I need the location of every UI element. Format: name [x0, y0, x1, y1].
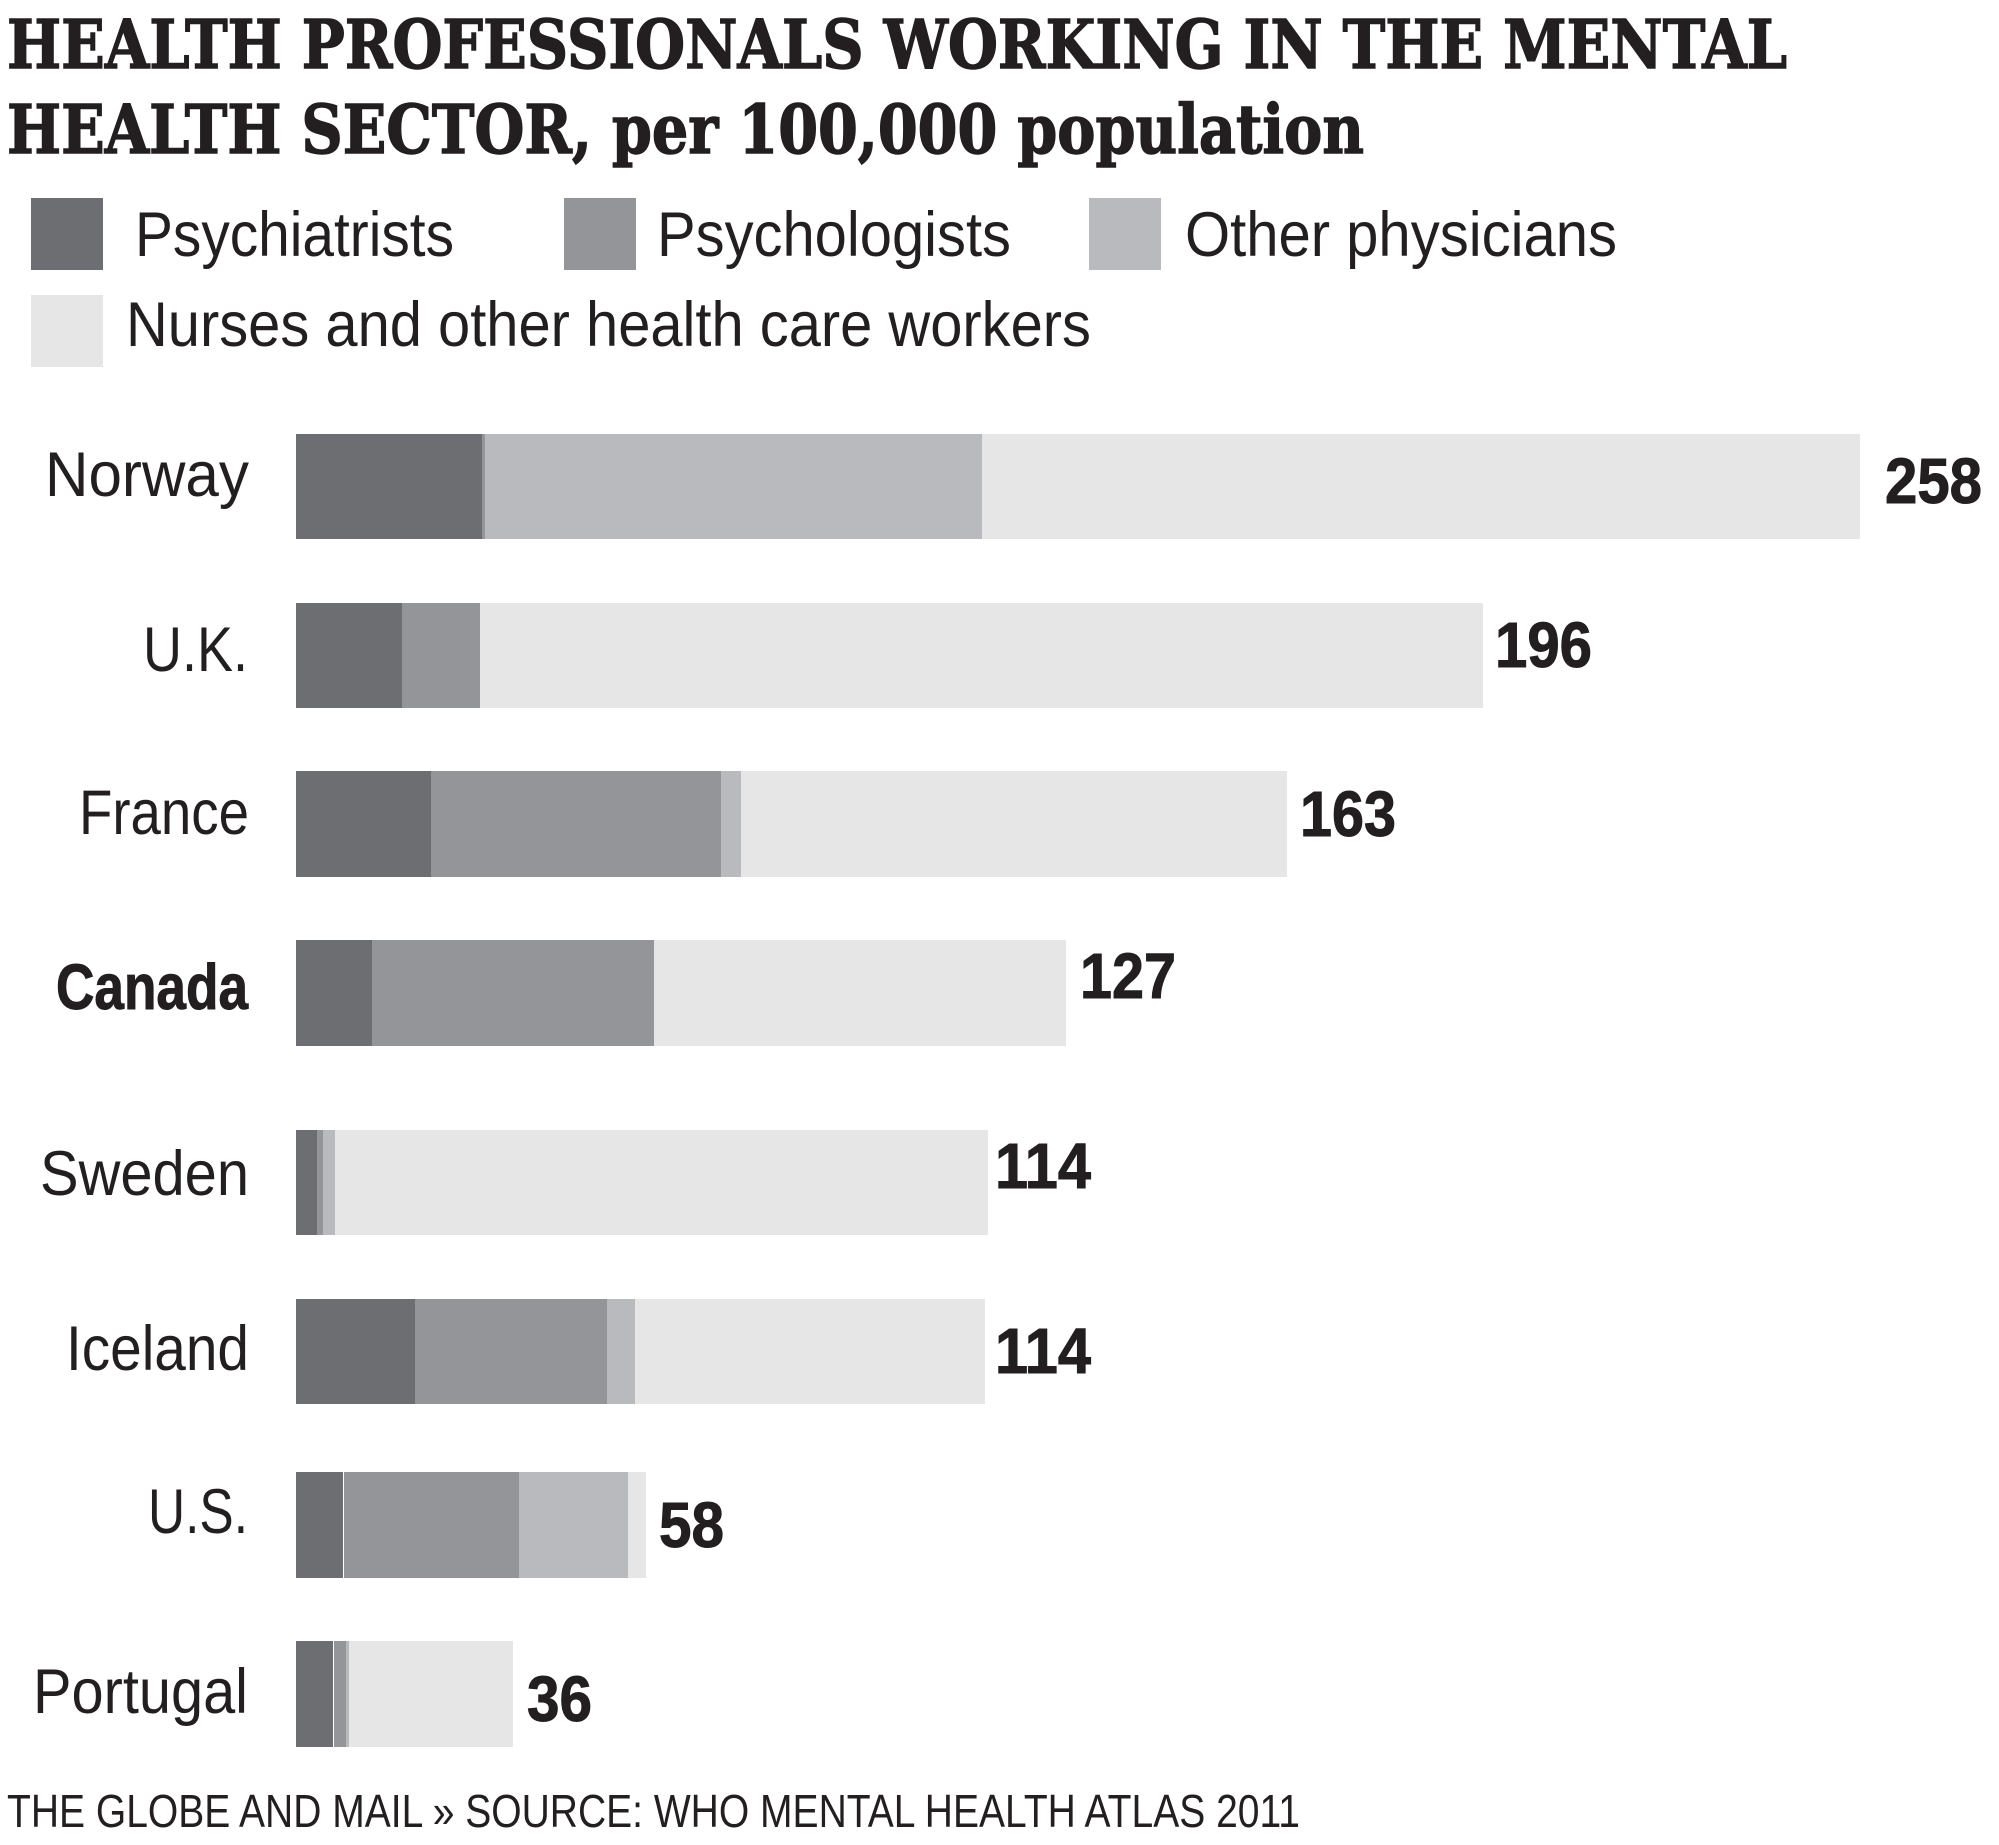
row: U.K.: U.K.: [143, 615, 248, 685]
row: Canada: 127: [1080, 940, 1176, 1012]
title: [7, 5, 1787, 169]
legend item: nurses and other health care workers: Nurses and other health care workers: [126, 290, 1091, 360]
legend: [31, 198, 1617, 367]
row: Canada: Canada: [56, 951, 248, 1023]
row: Sweden: 114: [995, 1130, 1091, 1202]
row: U.S.: 58: [659, 1489, 724, 1561]
row: Iceland: 114: [995, 1315, 1091, 1387]
row: Norway: 258: [1885, 445, 1982, 517]
row: U.S.: U.S.: [148, 1477, 248, 1547]
row: Portugal: [33, 1641, 592, 1747]
legend item: psychiatrists: [31, 198, 454, 270]
row: Sweden: [40, 1130, 1091, 1235]
row: France: France: [79, 778, 249, 848]
row: Norway: Norway: [45, 440, 249, 510]
row: Iceland: [66, 1299, 1091, 1404]
stacked bar chart: [33, 434, 1982, 1747]
legend item: other physicians: Other physicians: [1185, 200, 1617, 270]
legend item: psychiatrists: Psychiatrists: [135, 200, 454, 270]
row: Norway: [45, 434, 1982, 539]
row: France: [79, 771, 1396, 877]
row: Iceland: Iceland: [66, 1314, 249, 1384]
row: Portugal: Portugal: [33, 1657, 248, 1727]
row: Portugal: 36: [527, 1663, 592, 1735]
row: U.K.: [143, 603, 1592, 708]
row: Canada: [56, 940, 1176, 1046]
source footer: THE GLOBE AND MAIL » SOURCE: WHO MENTAL HEALTH ATLAS 2011: [7, 1785, 1300, 1837]
title: HEALTH SECTOR, per 100,000 population: [7, 90, 1364, 169]
row: U.K.: 196: [1495, 609, 1592, 681]
row: Sweden: Sweden: [40, 1139, 249, 1209]
row: France: 163: [1300, 778, 1396, 850]
row: U.S.: [148, 1472, 724, 1578]
legend item: psychologists: Psychologists: [657, 200, 1011, 270]
